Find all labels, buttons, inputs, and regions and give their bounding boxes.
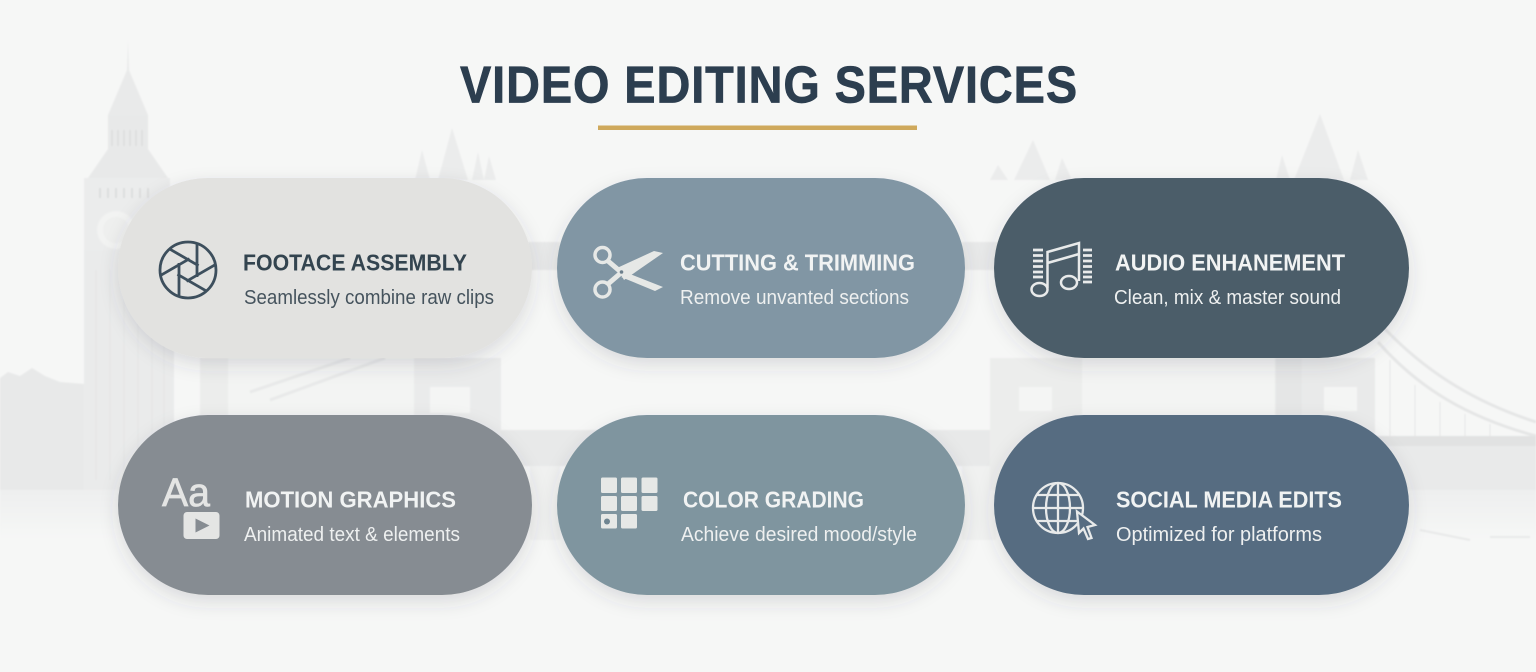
icon: camera aperture <box>160 242 216 298</box>
title: VIDEO EDITING SERVICES <box>460 56 1078 114</box>
heading: CUTTING & TRIMMING <box>680 250 915 276</box>
icon: music notes with level bars <box>1032 243 1092 296</box>
lower bridge deck <box>500 430 990 466</box>
tower bridge: left towers <box>200 128 501 490</box>
icon: colour swatch grid <box>601 478 658 528</box>
parliament buildings <box>0 368 85 490</box>
heading: FOOTACE ASSEMBLY <box>243 250 467 276</box>
icon: text and play button: Aa <box>162 471 211 515</box>
big ben <box>84 40 174 490</box>
icon: text and play button <box>162 471 220 539</box>
heading: SOCIAL MEDIA EDITS <box>1116 486 1342 512</box>
upper walkways <box>528 242 560 270</box>
description: Achieve desired mood/style <box>681 524 917 546</box>
icon: globe with cursor <box>1033 483 1095 539</box>
icon: scissors <box>595 248 663 297</box>
panel: motion graphics <box>118 415 532 595</box>
description: Remove unvanted sections <box>680 287 909 309</box>
title underline <box>598 126 917 130</box>
panel: audio enhancement <box>994 178 1409 358</box>
description: Optimized for platforms <box>1116 524 1322 546</box>
description: Clean, mix & master sound <box>1114 287 1341 309</box>
suspension span <box>1378 328 1536 436</box>
description: Animated text & elements <box>244 524 460 546</box>
heading: COLOR GRADING <box>683 486 864 512</box>
tower bridge: right towers <box>990 114 1375 490</box>
panel: cutting and trimming <box>557 178 965 358</box>
panel: color grading <box>557 415 965 595</box>
description: Seamlessly combine raw clips <box>244 287 494 309</box>
river band <box>0 490 1536 540</box>
heading: MOTION GRAPHICS <box>245 486 456 512</box>
panel: footage assembly <box>118 178 532 358</box>
panel: social media edits <box>994 415 1409 595</box>
heading: AUDIO ENHANEMENT <box>1115 250 1345 276</box>
